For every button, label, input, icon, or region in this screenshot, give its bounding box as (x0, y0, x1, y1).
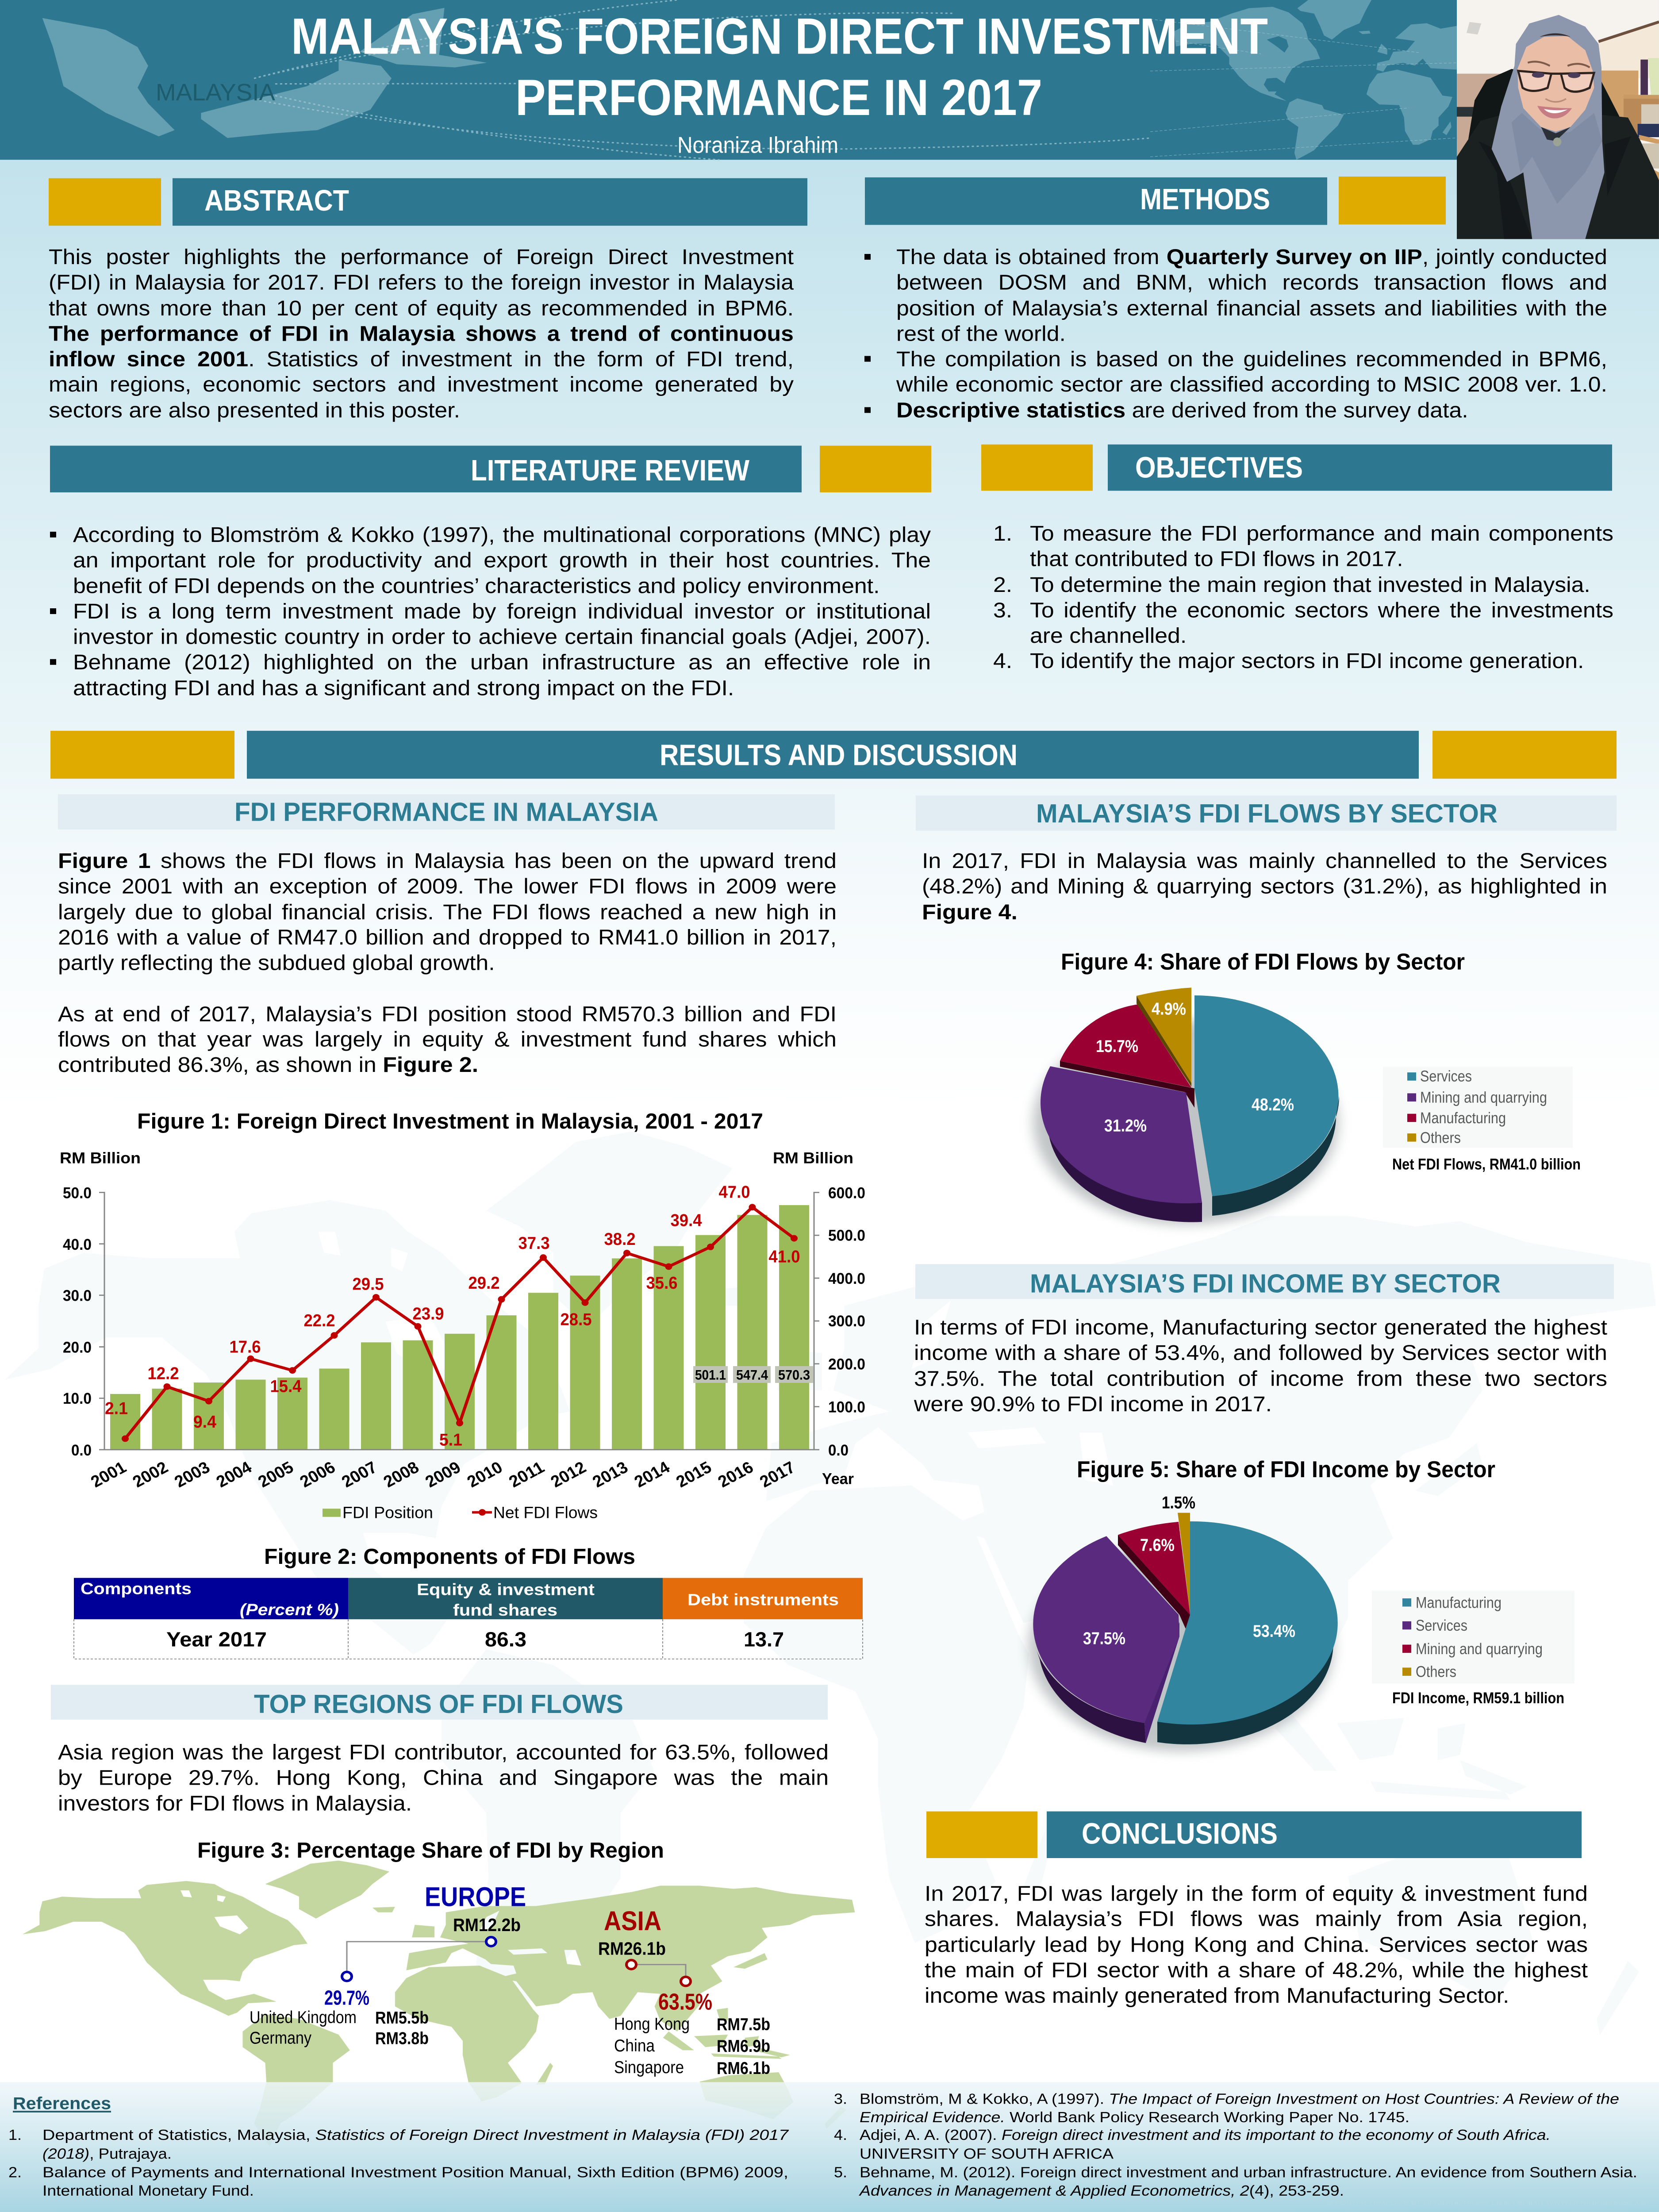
text block: abstract: This poster highlights the performance of Foreign Direct Investment (49, 245, 794, 269)
text: 2. (993, 572, 1012, 596)
year labels: 2017 (757, 1458, 799, 1491)
text block: methods: while economic sector are classified according to MSIC 2008 ver. 1.0. (896, 373, 1607, 396)
panel header: conclusions (926, 1811, 1582, 1858)
legend: figure 5 (1372, 1590, 1575, 1684)
figure 1 title: Figure 1: Foreign Direct Investment in Malaysia, 2001 - 2017 (137, 1109, 763, 1133)
references: right column: 4. (834, 2127, 847, 2143)
panel header: methods (865, 177, 1446, 225)
references: left column: 1. (8, 2127, 22, 2143)
text block: methods: The compilation is based on the guidelines recommended in BPM6, (896, 347, 1607, 371)
figure 5 title: Figure 5: Share of FDI Income by Sector (1077, 1457, 1495, 1482)
text block: methods: rest of the world. (896, 322, 1066, 345)
text block: FDI performance: since 2001 with an exception of 2009. The lower FDI flows in 2009 were (58, 874, 837, 898)
text block: FDI performance: 2016 with a value of RM47.0 billion and dropped to RM41.0 billion in 2017, (58, 926, 837, 949)
text block: FDI performance: partly reflecting the subdued global growth. (58, 951, 495, 975)
pie chart: FDI flows by sector: 4.9% (1152, 999, 1186, 1018)
references: left column: Balance of Payments and International Investment Position Manual, Sixth Edition (BPM6) 2009, (42, 2164, 788, 2181)
flow value labels: 17.6 (229, 1337, 261, 1356)
axis titles: RM Billion (773, 1149, 853, 1167)
flow value labels: 12.2 (148, 1363, 179, 1383)
references: right column: UNIVERSITY OF SOUTH AFRICA (860, 2146, 1114, 2162)
pie chart: FDI income by sector: 7.6% (1140, 1535, 1175, 1555)
flow value labels: 37.3 (518, 1233, 549, 1253)
text block: methods: position of Malaysia’s external financial assets and liabilities with the (896, 296, 1607, 320)
chart legend (323, 1504, 598, 1522)
data tags on last three bars: 501.1 (695, 1367, 726, 1382)
left axis labels: 50.0 (63, 1184, 92, 1202)
table: components of FDI flows: Debt instruments (687, 1591, 839, 1609)
text block: flows by sector (922, 848, 1607, 926)
pie chart: FDI flows by sector: 31.2% (1104, 1116, 1147, 1135)
text block: methods (896, 244, 1607, 424)
axis titles (60, 1149, 854, 1487)
references: right column (834, 2091, 1637, 2199)
table: components of FDI flows: (Percent %) (240, 1601, 339, 1619)
chart legend: Net FDI Flows (493, 1504, 598, 1522)
text block: literature review: Behname (2012) highlighted on the urban infrastructure as an effective role in (73, 650, 931, 674)
year labels: 2015 (673, 1458, 715, 1491)
pie chart: FDI income by sector: 1.5% (1162, 1493, 1195, 1512)
Malaysia map label: MALAYSIA (156, 79, 276, 105)
right axis labels: 600.0 (828, 1184, 865, 1202)
figure 4 title: Figure 4: Share of FDI Flows by Sector (1061, 949, 1465, 975)
references: left column: (2018), Putrajaya. (42, 2146, 172, 2162)
year labels: 2008 (380, 1458, 422, 1491)
map annotation: Europe: RM3.8b (375, 2028, 429, 2048)
pie chart: FDI income by sector: 37.5% (1083, 1628, 1125, 1648)
axis titles: RM Billion (60, 1149, 141, 1167)
year labels: 2009 (422, 1458, 464, 1491)
map annotation: Europe: United Kingdom (250, 2008, 357, 2027)
map annotation: Asia (598, 1906, 770, 2078)
text block: income by sector: were 90.9% to FDI income in 2017. (914, 1392, 1272, 1416)
legend: figure 5: Others (1416, 1663, 1456, 1680)
text block: top regions: investors for FDI flows in Malaysia. (58, 1791, 412, 1815)
left axis labels: 40.0 (63, 1236, 92, 1253)
note: net FDI flows total: Net FDI Flows, RM41.0 billion (1392, 1156, 1581, 1173)
references: right column: Empirical Evidence. World Bank Policy Research Working Paper No. 1745. (860, 2109, 1409, 2126)
map annotation: Europe: RM5.5b (375, 2008, 429, 2028)
year labels: 2011 (506, 1458, 548, 1491)
map: share of FDI by region base (23, 1861, 855, 2147)
map annotation: Asia: ASIA (604, 1906, 661, 1936)
panel header: methods: METHODS (1140, 183, 1270, 216)
data tags on last three bars (693, 1366, 813, 1383)
text block: objectives: To identify the major sectors in FDI income generation. (1030, 649, 1584, 673)
text block: objectives: To measure the FDI performance and main components (1030, 522, 1613, 545)
left axis labels: 0.0 (71, 1441, 92, 1459)
author photo (1457, 0, 1659, 239)
subheading: FDI flows by sector: MALAYSIA’S FDI FLOWS BY SECTOR (1036, 799, 1498, 829)
year labels: 2013 (589, 1458, 631, 1491)
chart: FDI position and net flows (60, 1149, 865, 1522)
text block: methods: The data is obtained from Quarterly Survey on IIP, jointly conducted (896, 245, 1607, 269)
text block: flows by sector: (48.2%) and Mining & quarrying sectors (31.2%), as highlighted in (922, 874, 1607, 898)
map annotation: Asia: RM6.1b (717, 2058, 770, 2078)
flow value labels (105, 1182, 800, 1449)
footer band (0, 2082, 1659, 2212)
bars: FDI position (110, 1205, 809, 1450)
text block: literature review: investor in domestic country in order to achieve certain financial goals (Adjei, 2007). (73, 625, 931, 649)
text block: literature review: benefit of FDI depends on the countries’ characteristics and policy environment. (73, 574, 879, 598)
map annotation: Europe: Germany (250, 2028, 312, 2047)
text block: methods: Descriptive statistics are derived from the survey data. (896, 398, 1468, 422)
right axis labels: 100.0 (828, 1398, 865, 1416)
text block: flows by sector: Figure 4. (922, 900, 1018, 924)
year labels: 2012 (547, 1458, 590, 1491)
flow value labels: 15.4 (270, 1376, 302, 1396)
flow value labels: 29.5 (353, 1274, 384, 1294)
flow value labels: 39.4 (671, 1210, 702, 1230)
table: components of FDI flows: 13.7 (744, 1628, 784, 1651)
subheading: FDI performance in Malaysia (58, 794, 835, 830)
map annotation: Asia: RM6.9b (717, 2036, 770, 2056)
flow value labels: 23.9 (413, 1304, 444, 1323)
figure 2 title: Figure 2: Components of FDI Flows (264, 1544, 635, 1569)
references: left column: International Monetary Fund. (42, 2183, 254, 2199)
text block: abstract: The performance of FDI in Malaysia shows a trend of continuous (49, 322, 794, 345)
legend: figure 4: Others (1420, 1129, 1461, 1146)
chart legend: FDI Position (342, 1504, 433, 1522)
pie chart: FDI flows by sector: 15.7% (1096, 1036, 1138, 1056)
text block: income by sector (914, 1314, 1607, 1418)
text block: objectives: that contributed to FDI flows in 2017. (1030, 547, 1403, 571)
line: net FDI flows (122, 1204, 798, 1442)
text block: income by sector: 37.5%. The total contribution of income from these two sectors (914, 1367, 1607, 1390)
text block: conclusions (925, 1881, 1588, 2009)
legend: figure 4: Manufacturing (1420, 1109, 1506, 1127)
text block: literature review: an important role for productivity and export growth in their host countries. The (73, 548, 931, 572)
axis titles: Year (822, 1470, 854, 1487)
text block: income by sector: income with a share of 53.4%, and followed by Services sector with (914, 1341, 1607, 1365)
text block: FDI performance: Figure 1 shows the FDI flows in Malaysia has been on the upward trend (58, 849, 837, 872)
header title: MALAYSIA’S FOREIGN DIRECT INVESTMENT (291, 8, 1268, 65)
pie chart: FDI income by sector (1029, 1493, 1338, 1751)
references: right column: 3. (834, 2091, 847, 2107)
text block: methods: between DOSM and BNM, which records transaction flows and (896, 270, 1607, 294)
table: components of FDI flows: fund shares (453, 1601, 557, 1619)
flow value labels: 9.4 (193, 1412, 216, 1431)
map annotation: Europe (250, 1882, 526, 2048)
map annotation: Asia: 63.5% (658, 1989, 712, 2015)
text block: top regions: Asia region was the largest FDI contributor, accounted for 63.5%, followed (58, 1740, 829, 1764)
header title: PERFORMANCE IN 2017 (515, 69, 1042, 126)
text: 4. (993, 649, 1012, 673)
background world map watermark (5, 1131, 1656, 2096)
left axis labels (63, 1184, 92, 1459)
text block: abstract: that owns more than 10 per cent of equity as recommended in BPM6. (49, 296, 794, 320)
flow value labels: 5.1 (439, 1430, 462, 1449)
map annotation: Europe: RM12.2b (453, 1915, 521, 1935)
subheading: FDI income by sector: MALAYSIA’S FDI INCOME BY SECTOR (1030, 1269, 1501, 1298)
text block: abstract: sectors are also presented in this poster. (49, 398, 460, 422)
author name: Noraniza Ibrahim (677, 132, 838, 158)
data tags on last three bars: 547.4 (736, 1367, 768, 1382)
text block: conclusions: particularly lead by Hong Kong and China. Services sector was (925, 1932, 1588, 1956)
panel header: objectives: OBJECTIVES (1135, 451, 1303, 484)
text block: FDI performance: flows on that year was largely in equity & investment fund shares which (58, 1027, 837, 1051)
year labels: 2016 (714, 1458, 757, 1491)
references: right column: Adjei, A. A. (2007). Foreign direct investment and its important to the economy of South Africa. (860, 2127, 1551, 2143)
text block: FDI performance (58, 848, 837, 1079)
text block: literature review: FDI is a long term investment made by foreign individual investor or institutional (73, 599, 931, 623)
left axis labels: 30.0 (63, 1287, 92, 1304)
text block: abstract: main regions, economic sectors and investment income generated by (49, 373, 794, 396)
subheading: FDI income by sector (915, 1264, 1614, 1299)
table: components of FDI flows: Equity & investment (417, 1581, 595, 1599)
pie chart: FDI flows by sector (1033, 987, 1339, 1225)
figure 3 title: Figure 3: Percentage Share of FDI by Region (197, 1838, 664, 1863)
references: left column (8, 2127, 789, 2199)
map annotation: Asia: China (614, 2035, 655, 2055)
text block: conclusions: shares. Malaysia’s FDI flows was mainly from Asia region, (925, 1907, 1588, 1931)
map annotation: Asia: RM7.5b (717, 2014, 770, 2034)
table: components of FDI flows: 86.3 (485, 1628, 526, 1651)
text block: objectives (1030, 521, 1613, 675)
flow value labels: 38.2 (604, 1229, 636, 1249)
text block: FDI performance: largely due to global financial crisis. The FDI flows reached a new high in (58, 900, 837, 924)
map annotation: Europe: EUROPE (425, 1882, 526, 1912)
legend: figure 4: Mining and quarrying (1420, 1089, 1547, 1106)
right axis labels: 500.0 (828, 1227, 865, 1244)
text block: conclusions: income was mainly generated from Manufacturing Sector. (925, 1984, 1509, 2007)
header banner (0, 0, 1457, 160)
map annotation: Asia: Hong Kong (614, 2014, 690, 2034)
panel header: results and discussion: RESULTS AND DISCUSSION (660, 738, 1018, 772)
flow value labels: 47.0 (719, 1182, 750, 1202)
data tags on last three bars: 570.3 (778, 1367, 810, 1382)
text: 3. (993, 598, 1012, 622)
panel header: abstract (49, 178, 807, 226)
references: left column: Department of Statistics, Malaysia, Statistics of Foreign Direct Investment in Malaysia (FDI) 2017 (42, 2127, 789, 2143)
text block: abstract: inflow since 2001. Statistics of investment in the form of FDI trend, (49, 347, 794, 371)
table: components of FDI flows: Year 2017 (166, 1628, 267, 1651)
panel header: objectives (981, 445, 1612, 491)
text block: conclusions: the main of FDI sector with a share of 48.2%, while the highest (925, 1958, 1588, 1982)
text block: abstract (49, 244, 794, 424)
flow value labels: 22.2 (304, 1311, 335, 1330)
text block: conclusions: In 2017, FDI was largely in the form of equity & investment fund (925, 1882, 1588, 1905)
year labels: 2007 (338, 1458, 380, 1491)
year labels (88, 1458, 799, 1491)
map annotation: Asia: Singapore (614, 2058, 684, 2077)
right axis labels: 200.0 (828, 1356, 865, 1373)
panel header: literature review (50, 445, 931, 492)
legend: figure 5: Manufacturing (1416, 1594, 1502, 1611)
year labels: 2001 (88, 1458, 130, 1491)
left axis labels: 10.0 (63, 1390, 92, 1407)
right axis labels: 300.0 (828, 1312, 865, 1330)
panel header: conclusions: CONCLUSIONS (1082, 1817, 1278, 1850)
subheading: FDI performance in Malaysia: FDI PERFORMANCE IN MALAYSIA (234, 798, 658, 827)
text block: top regions (58, 1739, 829, 1817)
text block: objectives: are channelled. (1030, 623, 1187, 647)
panel header: abstract: ABSTRACT (204, 184, 349, 217)
references: left column: 2. (8, 2164, 22, 2181)
year labels: 2003 (171, 1458, 213, 1491)
map annotation: Europe: 29.7% (324, 1986, 369, 2009)
text block: flows by sector: In 2017, FDI in Malaysia was mainly channelled to the Services (922, 849, 1607, 872)
header title (291, 8, 1268, 126)
legend: figure 4: Services (1420, 1068, 1472, 1085)
pie chart: FDI flows by sector: 48.2% (1252, 1095, 1294, 1114)
year labels: 2004 (213, 1458, 255, 1491)
subheading: top regions (51, 1685, 828, 1720)
flow value labels: 2.1 (105, 1398, 128, 1418)
panel header: results and discussion (50, 731, 1617, 779)
pie chart: FDI income by sector: 53.4% (1253, 1621, 1295, 1641)
references: right column: Advances in Management & Applied Econometrics, 2 (4), 253-259. (859, 2183, 1344, 2199)
text block: abstract: (FDI) in Malaysia for 2017. FDI refers to the foreign investor in Malaysia (49, 270, 794, 294)
table: components of FDI flows (74, 1578, 863, 1659)
text: 1. (993, 522, 1012, 545)
subheading: FDI flows by sector (916, 795, 1617, 831)
text block: top regions: by Europe 29.7%. Hong Kong, China and Singapore was the main (58, 1766, 829, 1790)
year labels: 2002 (129, 1458, 172, 1491)
note: FDI income total: FDI Income, RM59.1 billion (1392, 1689, 1564, 1707)
legend: figure 5: Services (1416, 1617, 1467, 1634)
map annotation: Asia: RM26.1b (598, 1939, 666, 1959)
text block: literature review: According to Blomström & Kokko (1997), the multinational corporations (MNC) play (73, 522, 931, 546)
text block: income by sector: In terms of FDI income, Manufacturing sector generated the highest (914, 1315, 1607, 1339)
text block: literature review: attracting FDI and has a significant and strong impact on the FDI. (73, 676, 734, 699)
subheading: top regions: TOP REGIONS OF FDI FLOWS (254, 1690, 623, 1719)
references: right column: 5. (834, 2164, 847, 2181)
year labels: 2006 (296, 1458, 339, 1491)
panel header: literature review: LITERATURE REVIEW (471, 454, 749, 487)
flow value labels: 28.5 (561, 1310, 592, 1329)
left axis labels: 20.0 (63, 1339, 92, 1356)
legend: figure 4 (1383, 1067, 1573, 1148)
text block: FDI performance: As at end of 2017, Malaysia’s FDI position stood RM570.3 billion and FDI (58, 1002, 837, 1025)
right axis labels: 400.0 (828, 1270, 865, 1287)
text block: objectives: To determine the main region that invested in Malaysia. (1030, 572, 1590, 596)
text block: FDI performance: contributed 86.3%, as shown in Figure 2. (58, 1053, 478, 1077)
references: right column: Blomström, M & Kokko, A (1997). The Impact of Foreign Investment on Host Countries: A Review of the (860, 2091, 1619, 2107)
right axis labels: 0.0 (828, 1441, 849, 1459)
right axis labels (828, 1184, 865, 1459)
year labels: 2014 (631, 1458, 673, 1491)
text block: literature review (73, 522, 931, 702)
flow value labels: 41.0 (769, 1247, 800, 1266)
table: components of FDI flows: Components (81, 1580, 192, 1598)
legend: figure 5: Mining and quarrying (1416, 1640, 1543, 1658)
flow value labels: 35.6 (646, 1273, 677, 1293)
year labels: 2010 (464, 1458, 506, 1491)
references heading: References (13, 2093, 111, 2113)
text block: objectives: To identify the economic sectors where the investments (1030, 598, 1613, 622)
references: right column: Behname, M. (2012). Foreign direct investment and urban infrastructure. An evidence from Southern Asia. (860, 2164, 1637, 2181)
year labels: 2005 (255, 1458, 297, 1491)
flow value labels: 29.2 (468, 1273, 499, 1293)
